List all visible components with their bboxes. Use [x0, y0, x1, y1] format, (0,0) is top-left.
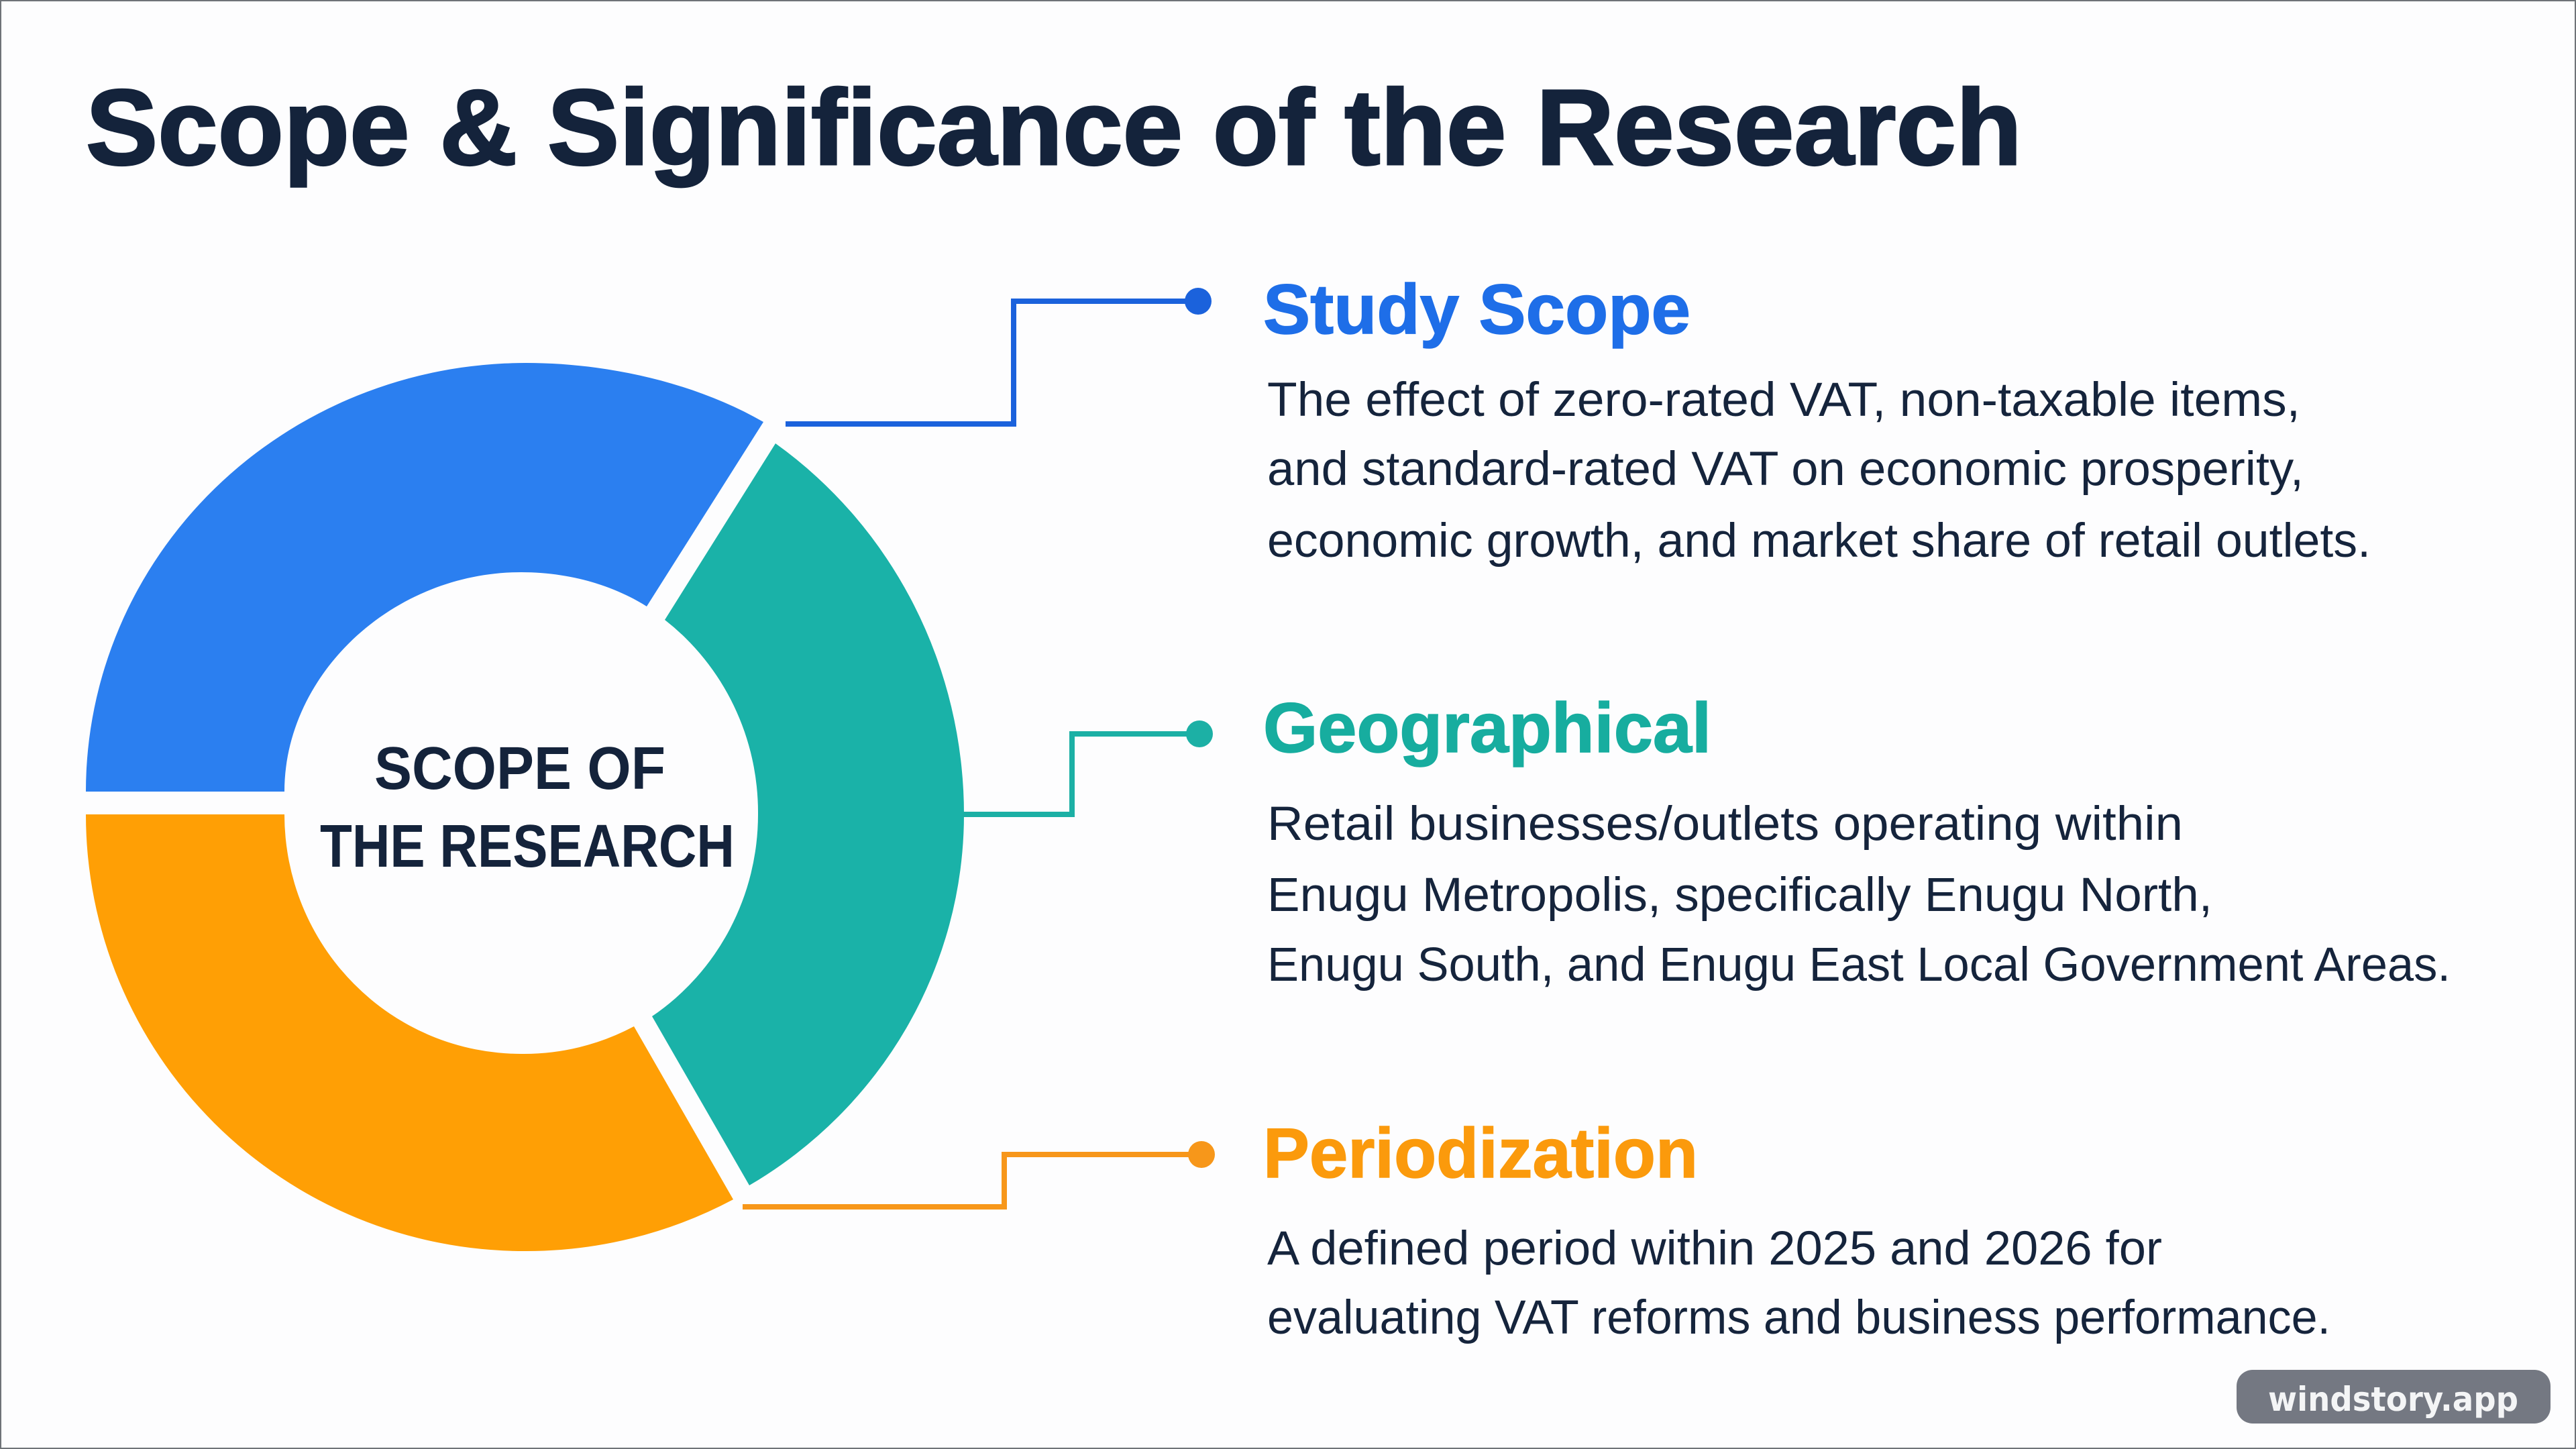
text block: geographical: Enugu South, and Enugu East Local Government Areas.: [1267, 938, 2451, 991]
segment: geographical (teal): [652, 443, 964, 1185]
heading: periodization: Periodization: [1263, 1114, 1698, 1193]
text block: periodization: evaluating VAT reforms and business performance.: [1267, 1291, 2330, 1344]
text block: study scope: The effect of zero-rated VAT, non-taxable items,: [1267, 374, 2300, 427]
text block: study scope: [1267, 374, 2371, 568]
donut chart: [86, 363, 964, 1251]
donut centre label: THE RESEARCH: [320, 813, 735, 880]
heading: geographical: Geographical: [1263, 689, 1711, 767]
watermark badge: [2237, 1370, 2551, 1424]
segment: study scope (blue): [86, 363, 763, 792]
donut centre label: SCOPE OF: [374, 735, 665, 802]
segment: periodization (orange): [86, 814, 733, 1251]
connector: study scope: [786, 288, 1212, 424]
connector: periodization: [743, 1141, 1215, 1207]
donut centre label: [320, 735, 735, 880]
text block: study scope: and standard-rated VAT on economic prosperity,: [1267, 443, 2304, 496]
text block: geographical: Enugu Metropolis, specifically Enugu North,: [1267, 869, 2212, 922]
text block: study scope: economic growth, and market share of retail outlets.: [1267, 515, 2371, 568]
connector: geographical: [963, 720, 1213, 814]
text block: geographical: [1267, 798, 2451, 991]
text block: periodization: A defined period within 2025 and 2026 for: [1267, 1222, 2162, 1275]
title: Scope & Significance of the Research: [86, 67, 2022, 187]
text block: geographical: Retail businesses/outlets operating within: [1267, 798, 2183, 851]
watermark badge: windstory.app: [2268, 1380, 2518, 1419]
text block: periodization: [1267, 1222, 2330, 1344]
heading: study scope: Study Scope: [1263, 270, 1690, 349]
